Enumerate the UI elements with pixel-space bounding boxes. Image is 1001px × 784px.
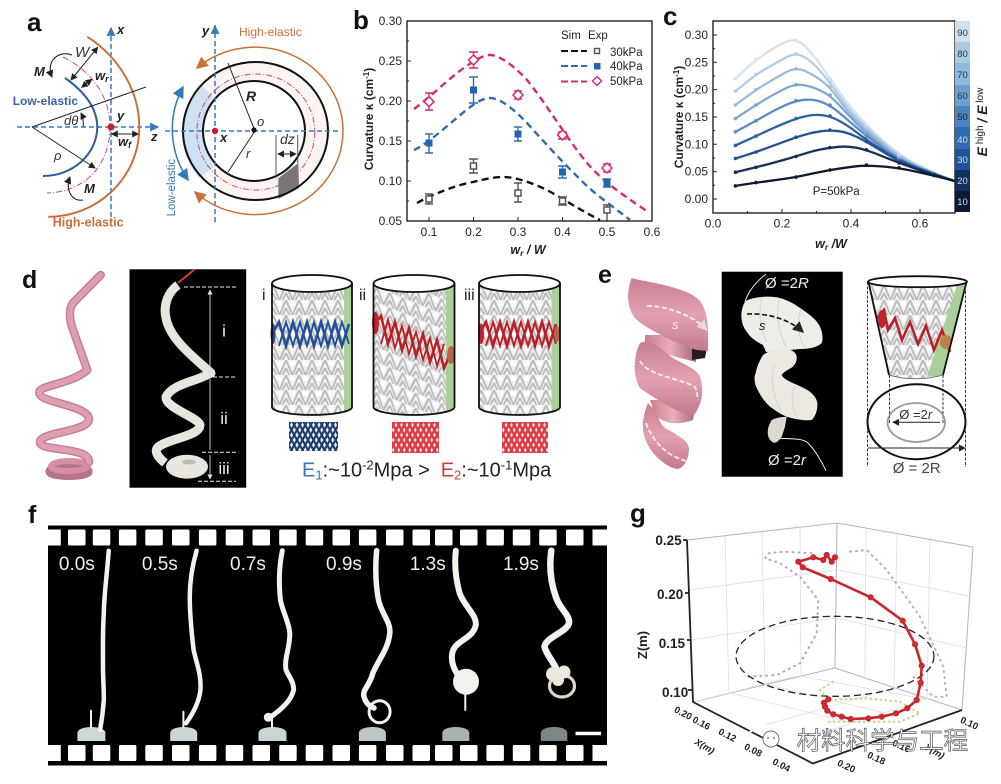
axis tick labels: 0.25 bbox=[655, 533, 682, 548]
time labels: 0.5s bbox=[142, 554, 178, 575]
panel e: conical helix bbox=[598, 261, 967, 477]
time labels: 0.0s bbox=[59, 554, 95, 575]
scale bar bbox=[576, 732, 601, 735]
axis labels: / E bbox=[974, 105, 990, 124]
cylinder iii: red band bbox=[464, 275, 560, 415]
colorbar: 50 bbox=[957, 112, 968, 123]
axis labels: w bbox=[815, 237, 825, 251]
section points bbox=[212, 127, 257, 134]
film strip bbox=[46, 526, 609, 766]
40kPa markers bbox=[426, 86, 610, 186]
left diagram labels: dθ bbox=[64, 113, 78, 128]
right diagram labels bbox=[166, 23, 302, 216]
axis labels: 0.25 bbox=[379, 54, 402, 68]
axis tick labels: 0.04 bbox=[770, 757, 793, 775]
axis labels: E bbox=[974, 147, 990, 156]
photo: inflated helix: Ø =2R bbox=[765, 275, 809, 292]
colorbar: 60 bbox=[957, 91, 968, 102]
modulus comparison text: Mpa bbox=[512, 460, 552, 482]
pink conical helix model: s bbox=[672, 317, 679, 332]
left diagram labels: w bbox=[95, 68, 105, 83]
axis labels: 0.25 bbox=[685, 55, 708, 69]
red neutral point bbox=[108, 124, 114, 130]
time labels bbox=[59, 554, 539, 575]
colorbar: 70 bbox=[957, 70, 968, 81]
axis labels: 0.20 bbox=[379, 94, 402, 108]
axis labels: 0.10 bbox=[685, 137, 708, 151]
photo: inflated helix bbox=[722, 272, 843, 477]
legend bbox=[561, 30, 643, 88]
curves family bbox=[735, 40, 954, 186]
right diagram labels: Low-elastic bbox=[166, 159, 178, 216]
colorbar bbox=[955, 21, 970, 212]
axis tick labels: 0.16 bbox=[890, 738, 912, 756]
right diagram labels: R bbox=[246, 88, 257, 104]
axis tick labels: X(m) bbox=[691, 736, 716, 757]
axis tick labels: Y(m) bbox=[922, 742, 946, 762]
legend: Exp bbox=[588, 30, 608, 42]
right diagram labels: o bbox=[257, 114, 264, 129]
axis labels: 0.1 bbox=[421, 225, 438, 239]
axis labels: 0.15 bbox=[379, 134, 402, 148]
axis tick labels: 0.20 bbox=[672, 705, 694, 723]
30kPa markers bbox=[426, 163, 610, 213]
modulus comparison text: 1 bbox=[315, 468, 323, 483]
axis labels: 0.30 bbox=[379, 14, 402, 28]
label a: a bbox=[27, 7, 42, 37]
axis tick labels: 0.15 bbox=[659, 636, 685, 651]
photo: inflated helix: s bbox=[759, 318, 766, 333]
dotted wall projections bbox=[748, 550, 947, 722]
axis labels: ) bbox=[362, 68, 376, 72]
left diagram labels: x bbox=[116, 22, 125, 37]
label f: f bbox=[28, 501, 37, 529]
left diagram labels: Low-elastic bbox=[13, 94, 78, 108]
colorbar: 90 bbox=[957, 28, 968, 39]
3D box grid bbox=[687, 523, 973, 740]
cone schematic: Ø =2r bbox=[899, 407, 933, 422]
axis labels: P=50kPa bbox=[813, 186, 860, 198]
modulus comparison text: :~10 bbox=[323, 460, 362, 482]
cylinder i: blue band: i bbox=[262, 287, 266, 304]
colorbar: 80 bbox=[957, 49, 968, 60]
axis labels: 0.4 bbox=[843, 216, 860, 230]
error bars bbox=[425, 52, 611, 220]
axis labels: 0.3 bbox=[510, 225, 527, 239]
axis labels: 0.0 bbox=[705, 216, 722, 230]
curve sample markers bbox=[735, 40, 934, 186]
red trajectory bbox=[796, 552, 924, 722]
axis labels: r bbox=[825, 242, 829, 252]
axis tick labels: 0.20 bbox=[657, 587, 683, 602]
time labels: 0.9s bbox=[326, 554, 362, 575]
modulus comparison text: E bbox=[302, 460, 315, 482]
photo: inflated helix: Ø =2r bbox=[768, 452, 807, 469]
colorbar: 40 bbox=[957, 135, 968, 146]
panel c: modulus ratio chart bbox=[663, 1, 990, 252]
50kPa markers bbox=[424, 55, 612, 173]
legend: 50kPa bbox=[610, 76, 643, 88]
axis labels: -1 bbox=[362, 71, 371, 79]
axis tick labels: Z(m) bbox=[635, 631, 650, 659]
right diagram: cross-section bbox=[165, 25, 343, 222]
panel f: film strip time sequence bbox=[28, 501, 609, 766]
legend: 40kPa bbox=[610, 61, 643, 73]
photo: soft robot spring: i bbox=[222, 322, 226, 340]
left diagram labels: r bbox=[105, 74, 109, 84]
cylinder ii: slanted red band bbox=[359, 275, 455, 415]
axis labels: ) bbox=[672, 66, 686, 70]
axis labels: low bbox=[975, 87, 986, 105]
axis tick labels: 0.12 bbox=[716, 727, 738, 745]
axis labels: 0.00 bbox=[685, 192, 708, 206]
watermark: 材料科学与工程 bbox=[797, 722, 968, 757]
time labels: 1.3s bbox=[410, 554, 446, 575]
pink conical helix model bbox=[628, 278, 708, 469]
axis labels: 0.20 bbox=[685, 83, 708, 97]
axis tick labels: 0.20 bbox=[835, 758, 857, 776]
actuator sequence bbox=[91, 551, 574, 730]
axis tick labels bbox=[635, 533, 980, 776]
cylinder i: blue band bbox=[262, 275, 352, 415]
label g: g bbox=[630, 498, 646, 528]
axis tick labels: 0.16 bbox=[690, 715, 712, 733]
axis labels: -1 bbox=[672, 69, 681, 77]
left diagram labels: w bbox=[118, 134, 128, 149]
axis labels bbox=[672, 28, 990, 252]
axis labels: w bbox=[510, 243, 520, 257]
axis labels: 0.4 bbox=[554, 225, 571, 239]
axis labels: Curvature κ (cm bbox=[362, 79, 376, 170]
axis labels bbox=[362, 14, 661, 258]
label b: b bbox=[353, 5, 369, 35]
axis labels: 0.30 bbox=[685, 28, 708, 42]
modulus comparison text: -2 bbox=[362, 458, 374, 473]
left diagram labels: W bbox=[75, 44, 91, 61]
panel a: curvature geometry bbox=[13, 7, 343, 230]
modulus comparison text: :~10 bbox=[461, 460, 501, 482]
bold axes bbox=[683, 540, 962, 764]
axis labels: r bbox=[520, 248, 524, 258]
photo: soft robot spring: ii bbox=[220, 409, 228, 428]
cone schematic: Ø = 2R bbox=[893, 460, 941, 477]
axis labels: 0.5 bbox=[599, 225, 616, 239]
knit swatches bbox=[289, 422, 548, 453]
pump bases bbox=[77, 727, 567, 741]
panel d: programmed spring bbox=[22, 266, 560, 488]
panel g: 3D trajectory bbox=[630, 498, 980, 776]
label c: c bbox=[663, 1, 677, 31]
axis labels: /W bbox=[828, 237, 848, 251]
left diagram labels: M bbox=[34, 64, 46, 79]
photo: soft robot spring bbox=[130, 269, 246, 488]
legend: 30kPa bbox=[610, 47, 643, 59]
cylinder ii: slanted red band: ii bbox=[359, 287, 366, 304]
plot frame and ticks bbox=[407, 21, 652, 221]
colorbar: 20 bbox=[957, 176, 968, 187]
left diagram labels: High-elastic bbox=[53, 216, 124, 230]
colorbar: 30 bbox=[957, 155, 968, 166]
axis labels: 0.05 bbox=[379, 214, 402, 228]
plot frame and ticks bbox=[713, 21, 955, 213]
time labels: 0.7s bbox=[230, 554, 266, 575]
right diagram labels: r bbox=[246, 146, 251, 161]
legend: Sim bbox=[561, 30, 581, 42]
left diagram labels: f bbox=[128, 140, 132, 150]
axis tick labels: 0.10 bbox=[662, 685, 688, 700]
modulus comparison text: Mpa > bbox=[374, 460, 430, 482]
right diagram labels: dz bbox=[280, 131, 295, 147]
left diagram labels: y bbox=[116, 108, 125, 123]
axis labels: 0.6 bbox=[912, 216, 929, 230]
colorbar: 10 bbox=[957, 197, 968, 208]
panel b: curvature vs wr/W chart bbox=[353, 5, 661, 258]
dashed reference ellipse bbox=[736, 616, 934, 696]
photo: soft robot spring: iii bbox=[218, 459, 230, 478]
left diagram: bent beam bbox=[17, 28, 158, 218]
left diagram labels: M bbox=[84, 181, 96, 196]
axis tick labels: 0.18 bbox=[865, 750, 887, 768]
time labels: 1.9s bbox=[503, 554, 539, 575]
right diagram labels: y bbox=[201, 23, 210, 38]
pink tube model bbox=[39, 275, 101, 476]
left diagram labels: ρ bbox=[53, 148, 62, 163]
axis labels: 0.6 bbox=[644, 225, 661, 239]
axis labels: 0.05 bbox=[685, 165, 708, 179]
axis tick labels: 0.10 bbox=[958, 715, 980, 733]
axis labels: Curvature κ (cm bbox=[672, 77, 686, 168]
left diagram labels bbox=[13, 22, 158, 230]
left diagram labels: z bbox=[150, 129, 158, 144]
label e: e bbox=[598, 261, 612, 289]
modulus comparison text bbox=[302, 458, 552, 483]
axis labels: 0.2 bbox=[465, 225, 482, 239]
modulus comparison text: E bbox=[441, 460, 454, 482]
label d: d bbox=[22, 266, 37, 294]
cone schematic bbox=[868, 276, 967, 477]
simulation curves bbox=[414, 55, 648, 220]
axis labels: 0.2 bbox=[774, 216, 791, 230]
modulus comparison text: 2 bbox=[454, 468, 461, 483]
right diagram labels: High-elastic bbox=[239, 25, 302, 39]
axis labels: / W bbox=[523, 243, 547, 257]
axis labels: 0.10 bbox=[379, 174, 402, 188]
cylinder iii: red band: iii bbox=[464, 287, 475, 304]
axis labels: high bbox=[975, 123, 986, 147]
right diagram labels: x bbox=[219, 130, 228, 145]
modulus comparison text: -1 bbox=[501, 458, 512, 473]
axis labels: 0.15 bbox=[685, 110, 708, 124]
axis tick labels: 0.08 bbox=[742, 742, 764, 760]
